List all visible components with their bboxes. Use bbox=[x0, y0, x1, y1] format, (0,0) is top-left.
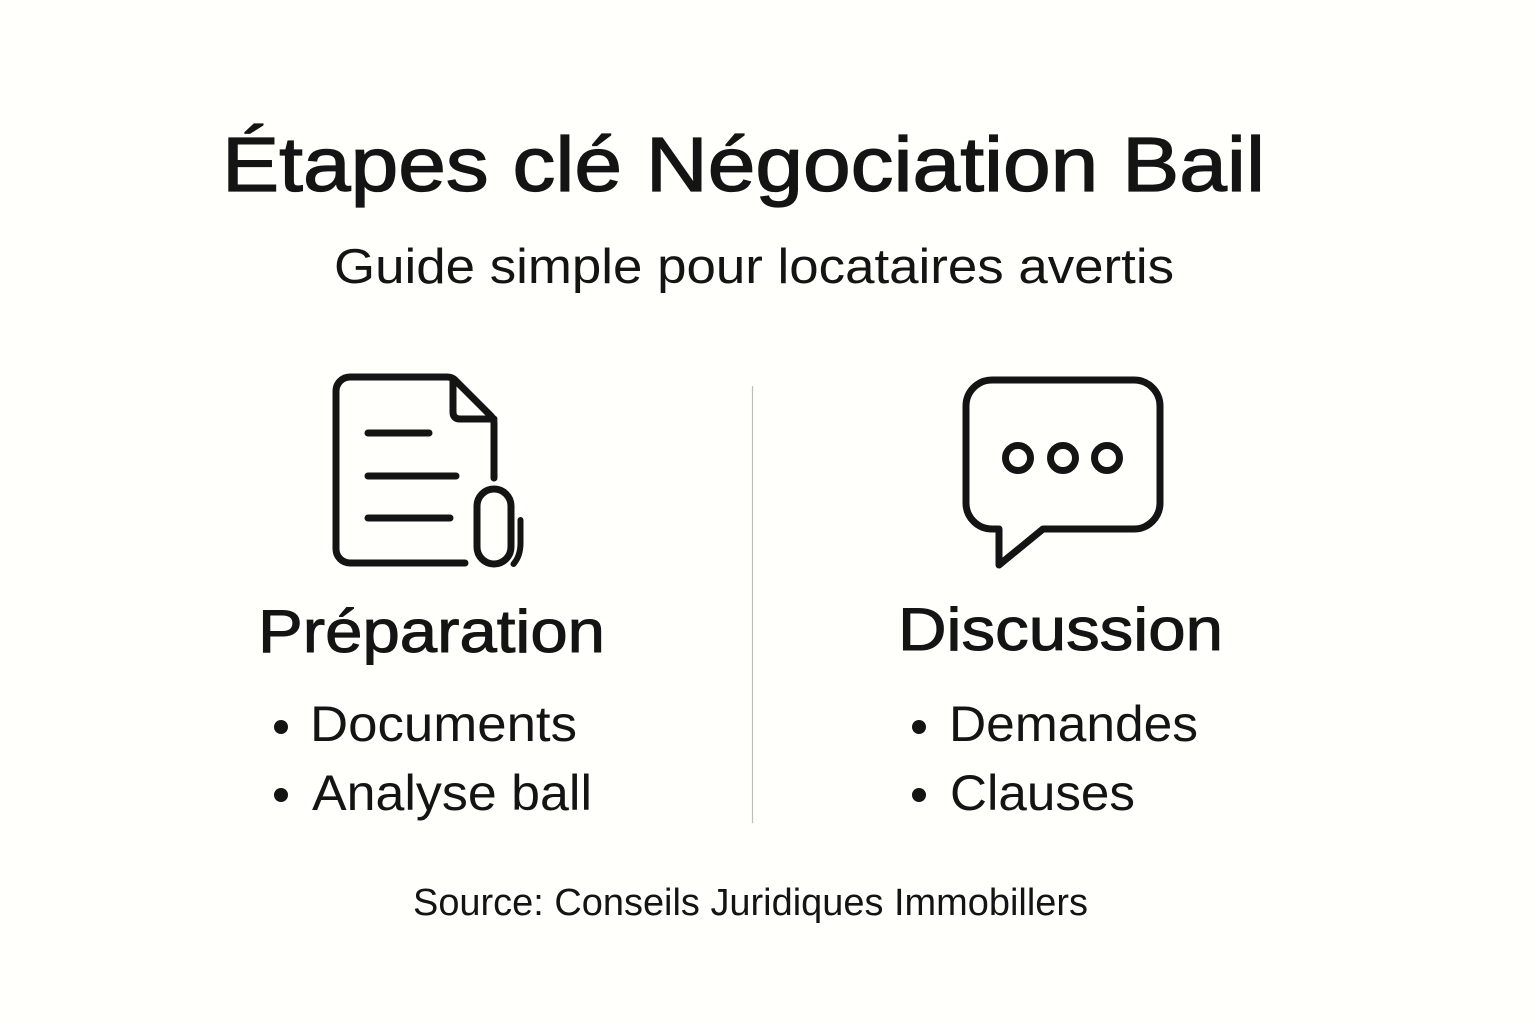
heading: discussion: Discussion bbox=[898, 596, 1223, 663]
title: Étapes clé Négociation Bail bbox=[222, 122, 1265, 208]
list: préparation items: Analyse ball bbox=[312, 765, 592, 821]
list: préparation items: Documents bbox=[310, 696, 577, 752]
icon: speech bubble bbox=[966, 380, 1160, 565]
source: Source: Conseils Juridiques Immobillers bbox=[413, 882, 1088, 924]
panel: discussion bbox=[898, 380, 1223, 821]
heading: préparation: Préparation bbox=[258, 598, 605, 665]
list: discussion items bbox=[912, 696, 1198, 821]
icon: document with paperclip bbox=[336, 377, 520, 564]
list: préparation items bbox=[274, 696, 592, 821]
subtitle: Guide simple pour locataires avertis bbox=[334, 240, 1174, 294]
panel: préparation bbox=[258, 377, 605, 821]
list: discussion items: Clauses bbox=[950, 765, 1135, 821]
list: discussion items: Demandes bbox=[949, 696, 1198, 752]
